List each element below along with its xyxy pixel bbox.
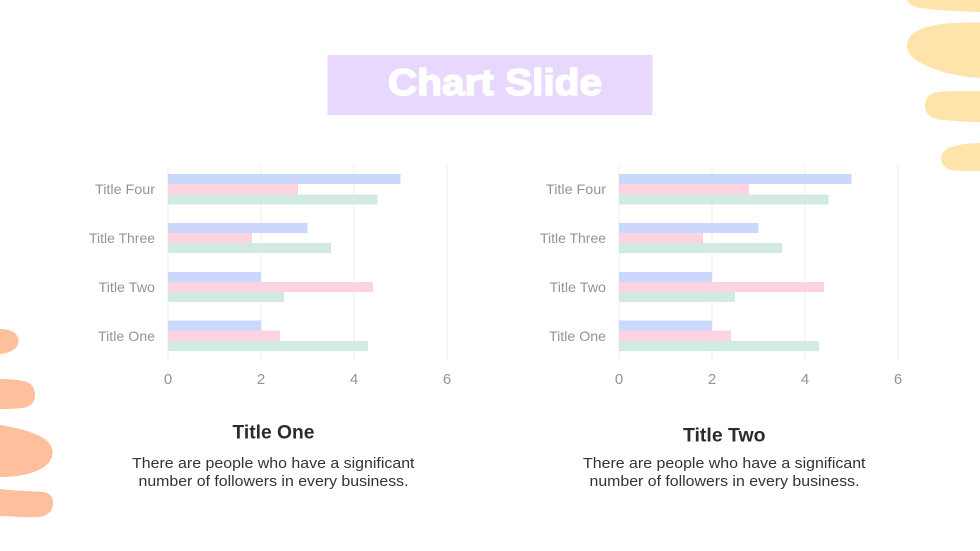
bars: Title One (168, 320, 368, 351)
category labels: Title Three (89, 230, 155, 246)
bars: Title Two (619, 272, 824, 302)
category labels: Title One (98, 328, 155, 344)
category labels: Title Two (98, 279, 155, 295)
bars: Title One (619, 320, 819, 351)
description (132, 455, 415, 490)
description (583, 455, 866, 490)
bar chart: right (540, 165, 902, 388)
heading: Title Two (683, 426, 766, 446)
axis ticks: 6 (443, 371, 451, 388)
axis ticks: 2 (257, 371, 265, 388)
description: There are people who have a significant (583, 455, 866, 472)
category labels: Title Four (95, 181, 155, 197)
text block: Title One (132, 422, 415, 490)
category labels: Title Four (546, 181, 606, 197)
bar chart: left (89, 165, 451, 388)
decoration: yellow blobs top right (907, 0, 980, 171)
heading: Title One (232, 422, 314, 444)
category labels: Title One (549, 328, 606, 344)
description: number of followers in every business. (138, 473, 408, 490)
text block: Title Two (583, 426, 866, 490)
category labels (540, 181, 606, 344)
title banner (328, 55, 652, 115)
category labels: Title Two (550, 279, 606, 295)
bars: Title Three (619, 223, 782, 253)
description: number of followers in every business. (590, 473, 860, 490)
bars: Title Four (168, 174, 400, 204)
description: There are people who have a significant (132, 455, 415, 472)
title text: Chart Slide (388, 62, 602, 103)
bars: Title Two (168, 272, 373, 302)
axis ticks: 0 (615, 371, 623, 388)
axis ticks (615, 371, 902, 388)
bars: Title Three (168, 223, 331, 253)
decoration: orange blobs bottom left (0, 329, 53, 517)
axis ticks: 6 (894, 371, 902, 388)
category labels (89, 181, 155, 344)
axis ticks: 4 (801, 371, 809, 388)
bars: Title Four (619, 174, 852, 204)
axis ticks (164, 371, 451, 388)
axis ticks: 4 (350, 371, 358, 388)
axis ticks: 2 (708, 371, 716, 388)
axis ticks: 0 (164, 371, 172, 388)
category labels: Title Three (540, 230, 606, 246)
